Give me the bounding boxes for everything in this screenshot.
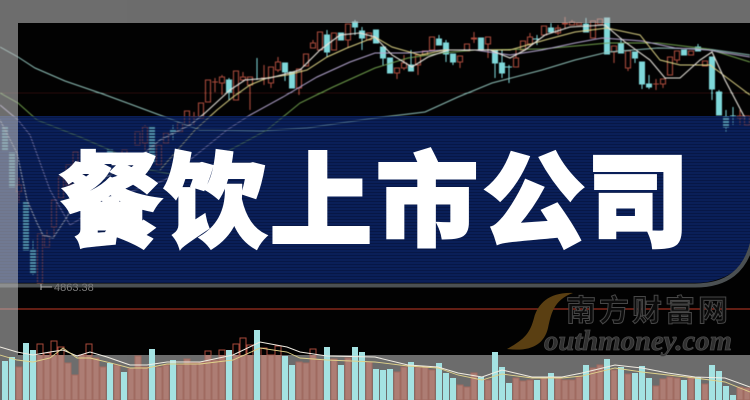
banner: dark blue panel — [0, 116, 750, 288]
watermark S swoosh — [507, 293, 573, 350]
low price label: 4863.38 — [54, 282, 94, 294]
red reference line — [0, 308, 750, 310]
title: 餐饮上市公司 — [60, 146, 689, 260]
red candles — [16, 17, 750, 283]
volume bars on black — [16, 338, 750, 400]
lavender moving average — [0, 38, 750, 225]
watermark domain: outhmoney.com — [544, 325, 732, 357]
cyan candles — [2, 18, 736, 275]
volume bars over gray band — [0, 330, 750, 400]
white fast moving average — [0, 25, 745, 238]
long moving average — [0, 47, 750, 131]
yellow moving average — [160, 28, 750, 170]
watermark: southmoney logo — [507, 293, 732, 357]
candlestick price chart — [0, 17, 750, 283]
red volume bars — [16, 338, 750, 400]
watermark chinese name: 南方财富网 — [566, 295, 731, 328]
green moving average — [0, 43, 750, 180]
